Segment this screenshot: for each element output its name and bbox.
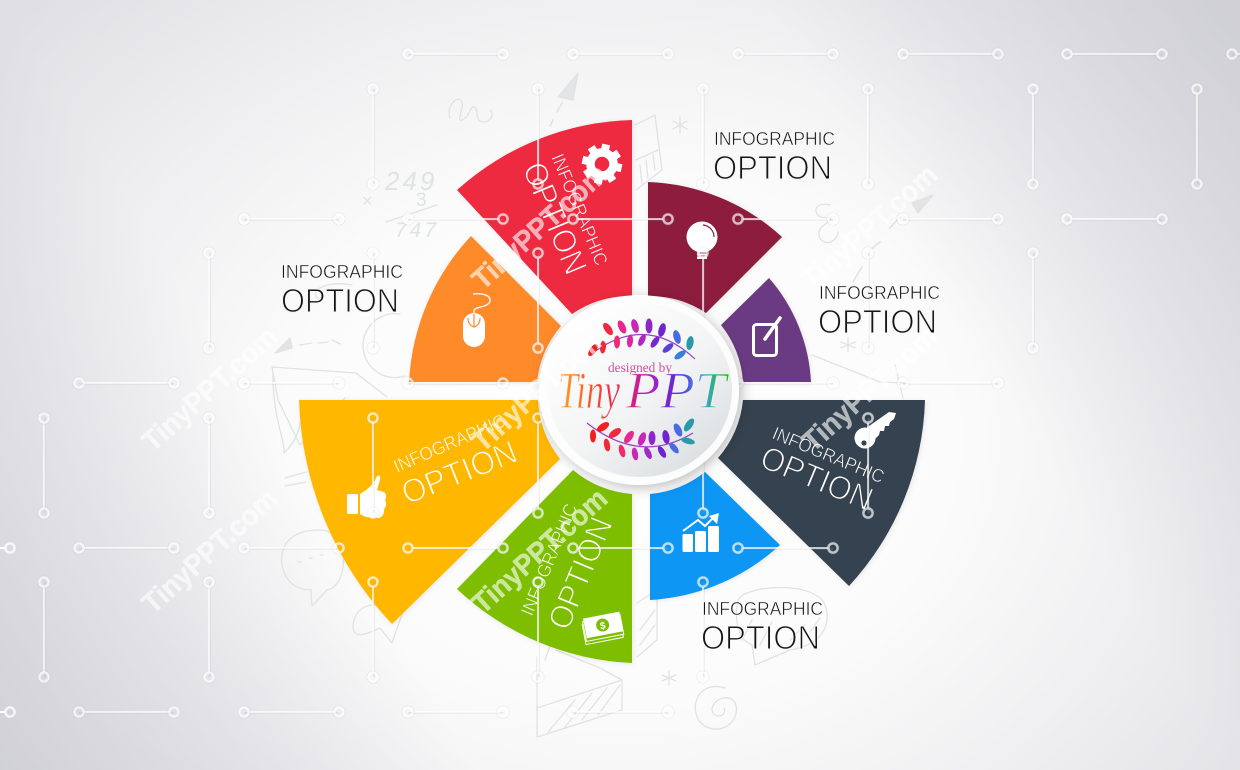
watermark text: TinyPPT.com	[466, 321, 614, 458]
background doodle sketches: 249	[384, 166, 437, 196]
background doodle sketches: 3	[416, 190, 427, 211]
label: top right option: OPTION	[713, 149, 832, 186]
sector: purple option	[721, 278, 811, 382]
label: left option	[281, 261, 403, 319]
label: bottom option: OPTION	[701, 619, 820, 656]
rotated label: green option: INFOGRAPHIC	[516, 501, 581, 619]
icon: banknote stack	[581, 612, 624, 645]
inner disc	[548, 303, 732, 477]
watermark text	[136, 159, 944, 620]
sector: green option	[457, 470, 632, 663]
rotated label: yellow option: OPTION	[396, 433, 522, 512]
donut wheel of eight sectors	[299, 120, 925, 663]
rotated label: green option: OPTION	[540, 512, 620, 635]
sector: maroon option	[648, 182, 782, 313]
center circle logo	[539, 295, 739, 485]
rotated label: dark slate option: INFOGRAPHIC	[769, 422, 887, 487]
text: Tiny PPT script logo: PPT	[625, 363, 729, 420]
sector: blue option	[650, 472, 780, 600]
watermark text: TinyPPT.com	[136, 483, 284, 620]
sector: red option	[457, 120, 632, 314]
icon: banknote stack: $	[599, 620, 607, 632]
text: designed by: designed by	[608, 360, 672, 375]
label: left option: INFOGRAPHIC	[281, 261, 403, 282]
watermark text: TinyPPT.com	[466, 483, 614, 620]
label: right option: OPTION	[818, 303, 937, 340]
background doodle sketches: 747	[395, 219, 439, 242]
icon: computer mouse	[463, 294, 490, 347]
label: top right option: INFOGRAPHIC	[714, 128, 835, 149]
icon: light bulb	[686, 222, 718, 259]
text: Tiny PPT script logo: Tiny	[558, 363, 621, 420]
label: left option: OPTION	[281, 282, 399, 319]
rotated label: red option: OPTION	[516, 157, 595, 280]
label: bottom option	[701, 598, 823, 656]
text: Tiny PPT script logo	[558, 363, 729, 420]
watermark text: TinyPPT.com	[466, 159, 614, 296]
icon: tablet and pen	[754, 318, 780, 356]
wreath: top	[586, 318, 695, 361]
sector: orange option	[409, 236, 561, 382]
sector: dark slate option	[718, 400, 925, 586]
rotated label: red option: INFOGRAPHIC	[547, 150, 612, 268]
icon: growth chart	[682, 513, 719, 552]
background doodle sketches: ×	[362, 191, 373, 211]
watermark text: TinyPPT.com	[796, 159, 944, 296]
icon: key	[854, 412, 896, 448]
rotated label: yellow option: INFOGRAPHIC	[390, 410, 509, 477]
label: top right option	[713, 128, 835, 186]
icon: gear	[578, 140, 626, 188]
label: bottom option: INFOGRAPHIC	[702, 598, 823, 619]
icon: thumbs up	[347, 476, 386, 518]
watermark text: TinyPPT.com	[796, 321, 944, 458]
rotated label: dark slate option: OPTION	[755, 438, 878, 518]
watermark text: TinyPPT.com	[136, 321, 284, 458]
label: right option	[818, 282, 940, 340]
wreath: bottom	[587, 417, 696, 461]
label: right option: INFOGRAPHIC	[819, 282, 940, 303]
background doodle sketches	[272, 73, 933, 737]
sector: yellow option	[299, 400, 560, 624]
